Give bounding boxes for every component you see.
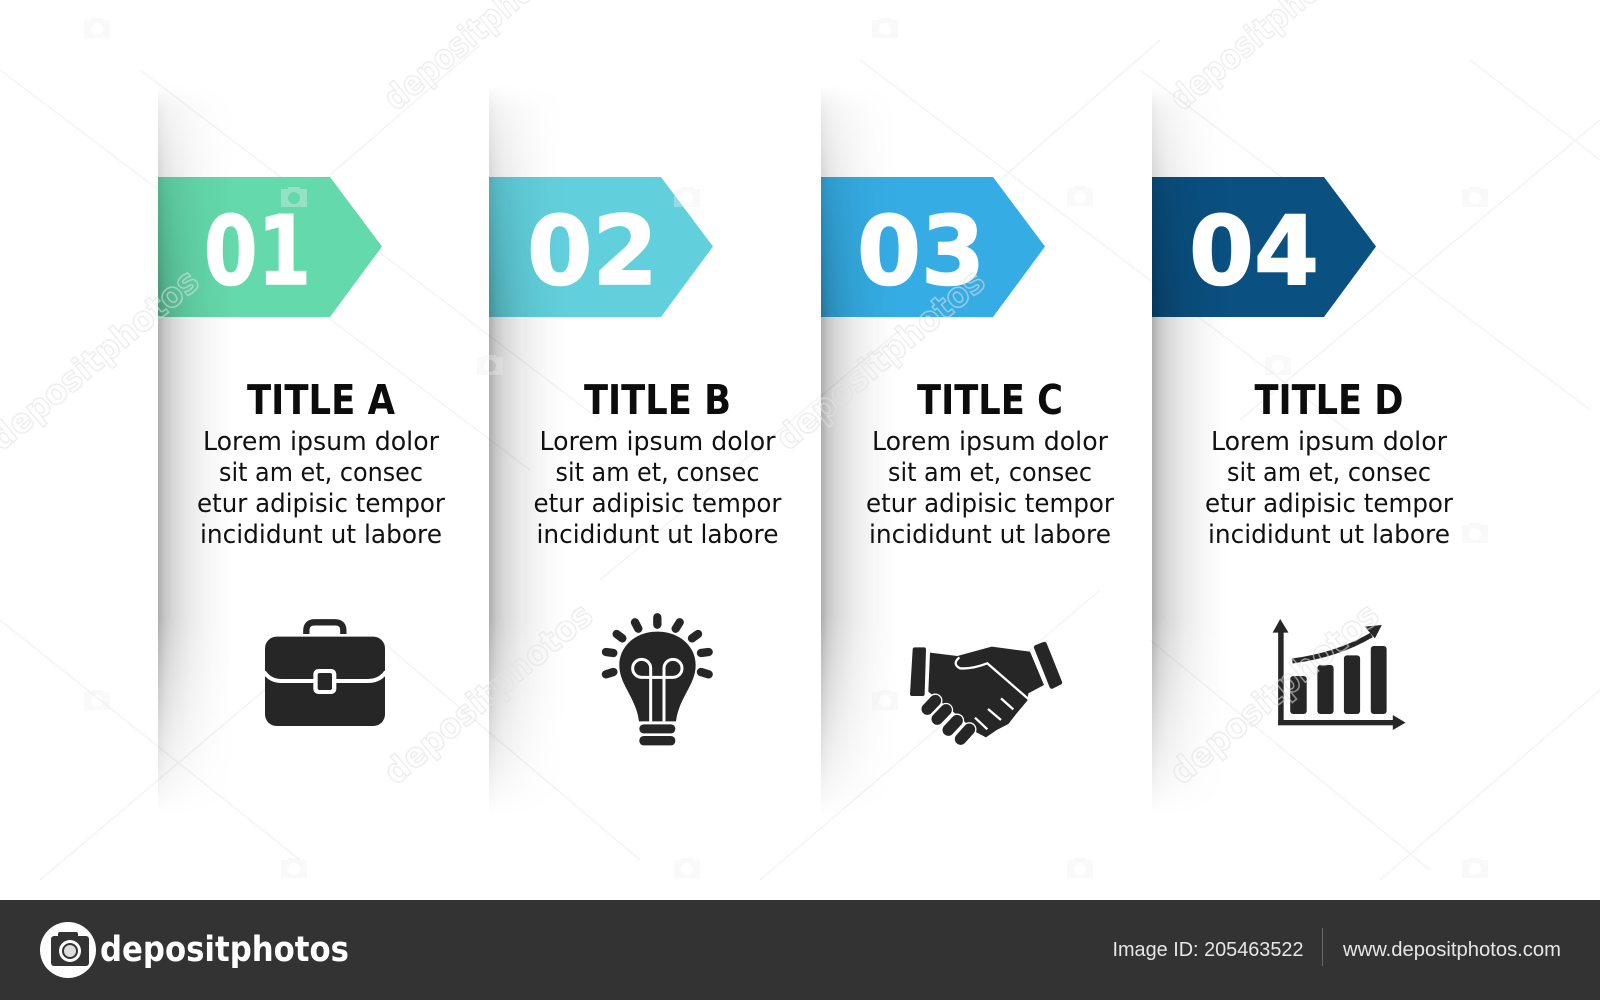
body text B: sit am et, consec <box>556 458 760 488</box>
title A: TITLE A <box>247 376 395 424</box>
icon: light bulb <box>606 617 709 745</box>
body text B: incididunt ut labore <box>536 520 778 550</box>
watermark: depositphotos <box>376 595 601 793</box>
number 02: 02 <box>527 197 658 307</box>
panel shadow <box>821 96 872 795</box>
footer logo: depositphotos <box>100 930 349 970</box>
title C: TITLE C <box>917 376 1063 424</box>
title B: TITLE B <box>584 376 731 424</box>
body text A: Lorem ipsum dolor <box>203 427 439 457</box>
arrow: 01 <box>158 177 382 317</box>
body text C: etur adipisic tempor <box>866 489 1114 519</box>
body text B <box>534 427 782 550</box>
body text D: incididunt ut labore <box>1208 520 1450 550</box>
body text C: sit am et, consec <box>888 458 1092 488</box>
number 04: 04 <box>1189 197 1319 307</box>
body text D <box>1205 427 1453 550</box>
footer logo <box>40 922 349 978</box>
image id: Image ID: 205463522 <box>1112 938 1304 961</box>
footer bar <box>0 900 1600 1000</box>
arrow: 03 <box>821 177 1045 317</box>
watermark: depositphotos <box>1162 595 1387 793</box>
number 03: 03 <box>857 197 985 307</box>
watermark: depositphotos <box>768 261 993 459</box>
number 01: 01 <box>204 197 311 307</box>
body text A: incididunt ut labore <box>200 520 442 550</box>
panel: step 01 <box>158 85 445 815</box>
body text D: sit am et, consec <box>1227 458 1431 488</box>
panel: step 02 <box>489 85 782 815</box>
website url: www.depositphotos.com <box>1342 938 1561 961</box>
body text C: Lorem ipsum dolor <box>872 427 1108 457</box>
body text D: etur adipisic tempor <box>1205 489 1453 519</box>
panel shadow <box>1152 96 1204 795</box>
body text B: Lorem ipsum dolor <box>540 427 776 457</box>
icon: growth chart <box>1273 619 1406 730</box>
panel shadow <box>489 96 540 795</box>
panel: step 04 <box>1152 85 1453 815</box>
panel: step 03 <box>821 85 1114 815</box>
body text A: etur adipisic tempor <box>197 489 445 519</box>
body text C <box>866 427 1114 550</box>
icon: handshake <box>910 642 1062 739</box>
title D: TITLE D <box>1254 376 1404 424</box>
body text A: sit am et, consec <box>219 458 423 488</box>
body text A <box>197 427 445 550</box>
arrow: 02 <box>489 177 713 317</box>
body text D: Lorem ipsum dolor <box>1211 427 1447 457</box>
arrow: 04 <box>1152 177 1376 317</box>
body text B: etur adipisic tempor <box>534 489 782 519</box>
icon: briefcase <box>264 622 386 726</box>
panel shadow <box>158 96 210 795</box>
body text C: incididunt ut labore <box>869 520 1111 550</box>
